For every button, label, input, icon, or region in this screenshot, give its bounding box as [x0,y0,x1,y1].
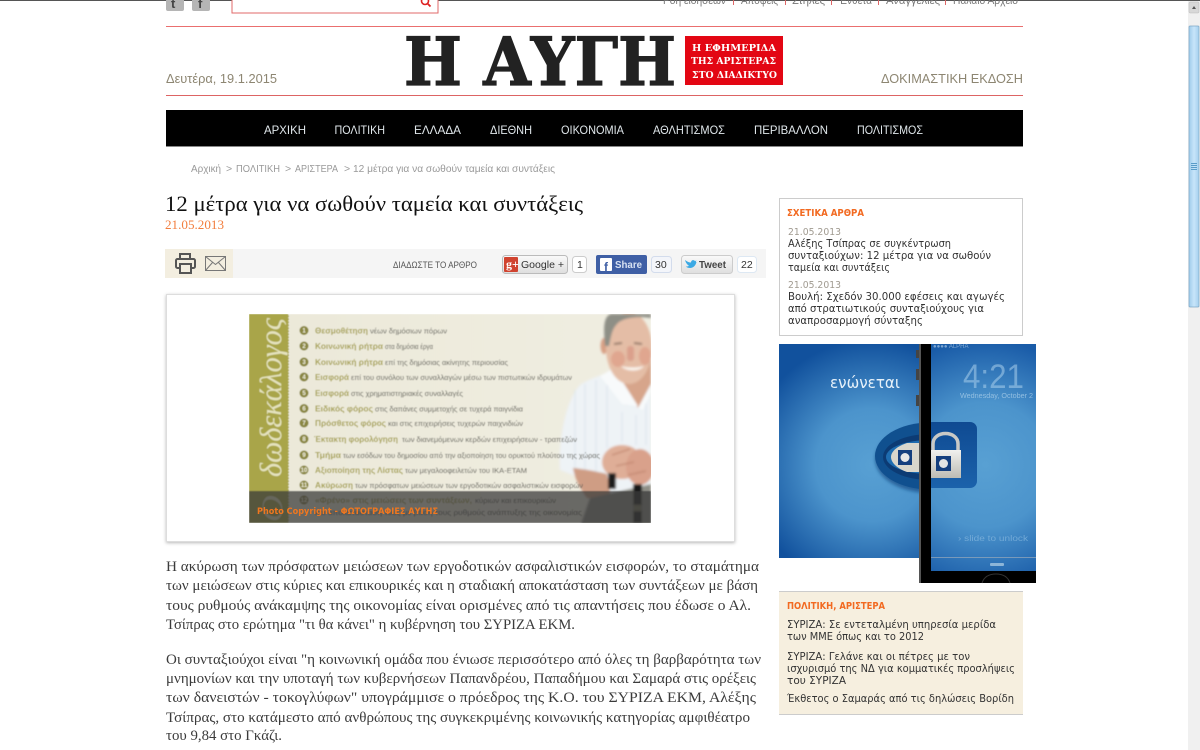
measures list: 2 [302,344,306,350]
measures list: στα δημόσια έργα [385,342,434,351]
google plus button: 1 [577,259,583,271]
icon: padlock [930,434,961,478]
olive side strip: Ο [256,495,289,522]
breadcrumb: Αρχική [191,163,221,175]
article paragraph 1: Τσίπρας στο ερώτημα "τι θα κάνει" η κυβέρνηση του ΣΥΡΙΖΑ ΕΚΜ. [166,617,575,633]
phone lock screen [925,344,1036,571]
breadcrumb [191,163,555,175]
panel: politics left news: των ΜΜΕ όπως και το 2012 [787,631,924,643]
share label: ΔΙΑΔΩΣΤΕ ΤΟ ΑΡΘΡΟ [393,260,477,271]
measures list: επί της δημόσιας ακίνητης περιουσίας [385,358,508,367]
logo tagline badge [685,36,783,85]
panel: related articles: ταμεία και συντάξεις [788,262,890,274]
heading: ΠΟΛΙΤΙΚΗ, ΑΡΙΣΤΕΡΑ [787,601,885,612]
measures list: Κοινωνική ρήτρα [315,357,384,367]
measures list: στις χρηματιστηριακές συναλλαγές [351,389,463,398]
measures list: Ειδικός φόρος [315,404,374,414]
infographic image: twelve measures [249,312,654,524]
measures list: «Φρένο» στις μειώσεις των συντάξεων, [315,495,472,505]
breadcrumb: ΠΟΛΙΤΙΚΗ [236,163,280,175]
navigation bar: ΠΟΛΙΤΙΣΜΟΣ [857,123,923,137]
measures list: Κοινωνική ρήτρα [315,341,384,351]
measures list: 7 [302,421,306,427]
ad left panel [779,344,919,558]
phone lock screen: ●●●● ALPHA [933,344,969,350]
phone body [916,344,1036,583]
panel: related articles [780,198,1022,336]
caption overlay [249,491,651,523]
panel: related articles: 21.05.2013 [788,280,841,291]
breadcrumb: 12 μέτρα για να σωθούν ταμεία και συντάξεις [353,163,555,175]
navigation bar: ΠΟΛΙΤΙΚΗ [334,123,385,137]
measures list: Έκτακτη φορολόγηση [314,434,398,444]
measures list: 12 [301,498,308,504]
measures list [300,326,600,517]
phone lock screen: Wednesday, October 2 [960,391,1033,400]
breadcrumb: > [226,163,232,175]
breadcrumb: > [285,163,291,175]
navigation bar: ΑΡΧΙΚΗ [264,123,306,137]
measures list: Ακύρωση [315,480,353,490]
panel: politics left news: ΣΥΡΙΖΑ: Σε εντεταλμένη υπηρεσία μερίδα [787,619,996,631]
top links [663,0,1018,7]
measures list: νέων δημόσιων πόρων [370,326,447,336]
panel: politics left news: ΣΥΡΙΖΑ: Γελάνε και οι πέτρες με τον [787,651,970,663]
navigation bar: ΠΕΡΙΒΑΛΛΟΝ [754,123,828,137]
article date: 21.05.2013 [165,217,224,232]
current date: Δευτέρα, 19.1.2015 [166,72,277,86]
article paragraph 2: των δανειστών - τοκογλύφων" υπογράμμισε ο πρόεδρος της Κ.Ο. του ΣΥΡΙΖΑ ΕΚΜ, Αλέξης [166,690,756,706]
logo tagline badge: ΤΗΣ ΑΡΙΣΤΕΡΑΣ [691,56,776,67]
logo tagline badge: ΣΤΟ ΔΙΑΔΙΚΤΥΟ [692,70,777,81]
twitter tweet button: Tweet [699,259,726,271]
article paragraph 1: τους ρυθμούς ανάκαμψης της οικονομίας είναι ορισμένες από τις απαντήσεις που έδωσε ο Αλ. [166,598,751,614]
search box [232,0,438,13]
panel: related articles: αναπροσαρμογή σύνταξης [788,315,923,327]
advertisement: bank app on phone [779,344,1036,583]
article paragraph 2: του 9,84 στο Γκάζι. [166,728,282,744]
measures list: των μεγαλοοφειλετών του ΙΚΑ-ΕΤΑΜ [405,466,527,475]
navigation bar: ΑΘΛΗΤΙΣΜΟΣ [653,123,725,137]
panel: related articles: Αλέξης Τσίπρας σε συγκέντρωση [788,238,951,250]
article paragraph 1: Η ακύρωση των πρόσφατων μειώσεων των εργοδοτικών ασφαλιστικών εισφορών, το σταμάτημα [166,559,759,575]
facebook share button: Share [615,259,642,271]
measures list: και στις επιχειρήσεις τυχερών παιχνιδιών [388,419,523,428]
twitter tweet button: 22 [741,259,753,271]
panel: politics left news: ισχυρισμό της ΝΔ για κομματικές προσλήψεις [787,663,1015,675]
measures list: 4 [302,375,306,381]
phone lock screen: › slide to unlock [958,533,1029,543]
measures list: των διανεμόμενων κερδών επιχειρήσεων - τραπεζών [402,435,577,444]
heading: ΣΧΕΤΙΚΑ ΑΡΘΡΑ [787,208,864,219]
twitter tweet button [682,256,756,274]
olive side strip [249,314,289,523]
measures list: 9 [302,453,306,459]
navigation bar: ΟΙΚΟΝΟΜΙΑ [561,123,624,137]
photo of elderly man [560,312,654,524]
article paragraph 2: μνημονίων και την υποταγή των κυβερνήσεων Παπανδρέου, Παπαδήμου και Σαμαρά στις ορέξεις [166,671,756,687]
measures list: Θεσμοθέτηση [315,326,368,336]
social icons [166,0,210,11]
panel: politics left news [779,591,1023,715]
photo copyright caption: Photo Copyright - ΦΩΤΟΓΡΑΦΙΕΣ ΑΥΓΗΣ [257,507,438,517]
article paragraph 2: Οι συνταξιούχοι είναι "η κοινωνική ομάδα που ένιωσε περισσότερο από όλες τη βαρβαρότητα των [166,652,761,668]
icon: printer [176,254,195,273]
edition label: ΔΟΚΙΜΑΣΤΙΚΗ ΕΚΔΟΣΗ [881,72,1023,86]
panel: politics left news: Έκθετος ο Σαμαράς από τις δηλώσεις Βορίδη [786,693,1014,705]
panel: related articles: Βουλή: Σχεδόν 30.000 εφέσεις και αγωγές [788,291,1005,303]
panel: related articles: συνταξιούχων: 12 μέτρα για να σωθούν [788,250,991,262]
article paragraph 2: Τσίπρας, στο κατάμεστο από ανθρώπους της συγκεκριμένης κοινωνικής κατηγορίας αμφιθέατρο [166,710,750,726]
measures list: 11 [301,483,308,489]
measures list: των εσόδων του δημοσίου από την αξιοποίηση του ορυκτού πλούτου της χώρας [343,451,600,460]
measures list: 6 [302,406,306,412]
measures list: 3 [302,360,306,366]
measures list: 8 [302,437,306,443]
measures list: Αξιοποίηση της Λίστας [315,465,404,475]
breadcrumb: ΑΡΙΣΤΕΡΑ [295,163,338,175]
phone lock screen: 4:21 [963,358,1024,396]
share bar [165,249,766,278]
measures list: Εισφορά [315,372,350,382]
measures list: επί του συνόλου των συναλλαγών μέσω των πιστωτικών ιδρυμάτων [351,373,572,382]
panel: politics left news: του ΣΥΡΙΖΑ [787,675,847,687]
facebook share button: f [604,260,609,274]
measures list: και αποκατάστασή τους με βάση τους ρυθμούς ανάπτυξης της οικονομίας [315,508,582,517]
measures list: Πρόσθετος φόρος [315,418,387,428]
logo tagline badge: Η ΕΦΗΜΕΡΙΔΑ [692,43,777,54]
measures list: των πρόσφατων μειώσεων των εργοδοτικών ασφαλιστικών εισφορών [355,481,583,490]
article title: 12 μέτρα για να σωθούν ταμεία και συντάξεις [165,191,583,216]
article paragraph 1: των μειώσεων στις κύριες και επικουρικές και η σταδιακή αποκατάσταση των συντάξεων με βάση [166,578,758,594]
photo card [166,294,734,542]
navigation bar [166,110,1023,147]
masthead logo: Η ΑΥΓΗ [404,23,676,101]
facebook share button [596,255,672,274]
olive side strip: δωδεκάλογος [253,318,288,477]
measures list: στις δαπάνες συμμετοχής σε τυχερά παιγνίδια [375,404,524,414]
icon: envelope [206,256,226,270]
panel: related articles: 21.05.2013 [788,227,841,238]
ad left panel: ενώνεται [830,373,900,392]
measures list: κύριων και επικουρικών [475,496,556,505]
google plus button [502,256,586,274]
article paragraph 1 [166,559,759,633]
facebook share button: 30 [655,259,667,271]
measures list: 5 [302,391,306,397]
google plus button: g+ [506,257,519,271]
measures list: 10 [301,468,308,474]
scrollbar [1188,1,1200,750]
measures list: Εισφορά [315,388,350,398]
breadcrumb: > [344,163,350,175]
panel: related articles: από στρατιωτικούς συνταξιούχους για [788,303,984,315]
google plus button: Google + [521,259,564,271]
navigation bar: ΕΛΛΑΔΑ [414,123,461,137]
article paragraph 2 [166,652,761,744]
measures list: 1 [302,328,306,334]
navigation bar: ΔΙΕΘΝΗ [490,123,532,137]
measures list: Τμήμα [315,450,342,460]
